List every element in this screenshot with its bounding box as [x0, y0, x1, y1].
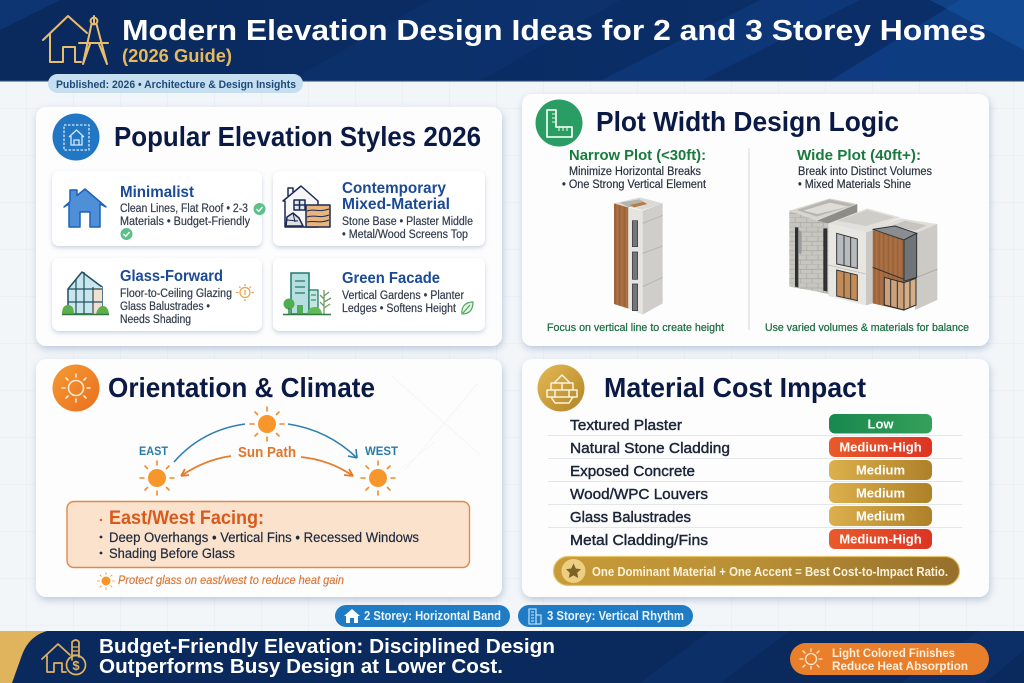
- card: glass-forward: [52, 258, 262, 331]
- row: exposed concrete: [570, 460, 932, 480]
- card: minimalist: Clean Lines, Flat Roof • 2-3: [120, 203, 248, 215]
- title: Modern Elevation Design Ideas for 2 and 3 Storey Homes: [122, 15, 986, 47]
- callout: east/west facing: Deep Overhangs • Vertical Fins • Recessed Windows: [109, 530, 419, 545]
- card: contemporary mixed-material: Contemporary: [342, 180, 446, 197]
- icon: glass house: [62, 272, 109, 314]
- note: protect glass: Protect glass on east/west to reduce heat gain: [118, 575, 344, 587]
- pill: 3 storey: 3 Storey: Vertical Rhythm: [547, 609, 684, 623]
- pill: 2 storey: 2 Storey: Horizontal Band: [364, 609, 501, 623]
- caption: narrow: Focus on vertical line to create height: [547, 322, 724, 334]
- card: minimalist: Minimalist: [120, 184, 194, 201]
- card: contemporary mixed-material: • Metal/Wood Screens Top: [342, 229, 468, 241]
- published pill: [48, 74, 303, 93]
- icon: house and compass: [43, 16, 108, 64]
- footer message: Outperforms Busy Design at Lower Cost.: [99, 656, 503, 678]
- caption: wide: Use varied volumes & materials for balance: [765, 322, 969, 334]
- card: glass-forward: Floor-to-Ceiling Glazing: [120, 288, 232, 300]
- row: glass balustrades: [570, 506, 932, 526]
- card: green facade: Vertical Gardens • Planter: [342, 290, 464, 302]
- sun path diagram: [139, 407, 399, 495]
- card: green facade: Ledges • Softens Height: [342, 303, 457, 315]
- row: glass balustrades: Medium: [856, 508, 905, 524]
- card: glass-forward: Glass-Forward: [120, 268, 223, 285]
- pill: 2 storey: [335, 605, 510, 627]
- icon: check marks: [120, 203, 266, 240]
- icon: blueprint house: [52, 114, 100, 160]
- icon: house with coin: $: [72, 658, 80, 673]
- published pill: Published: 2026 • Architecture & Design Insights: [56, 79, 296, 91]
- panel: material cost impact: [522, 359, 989, 597]
- wide plot text: [797, 147, 932, 191]
- row: wood/wpc louvers: Wood/WPC Louvers: [570, 486, 708, 503]
- sun path diagram: EAST: [139, 444, 169, 458]
- panel: popular elevation styles: [36, 107, 502, 346]
- row: metal cladding/fins: [570, 529, 932, 549]
- row: wood/wpc louvers: Medium: [856, 486, 905, 500]
- heading: Orientation & Climate: [108, 372, 375, 403]
- icon: small sun: [236, 284, 254, 301]
- banner: best ratio: [554, 556, 960, 586]
- illustration: wide building: [789, 198, 937, 311]
- icon: bricks: [538, 364, 584, 412]
- heading: Popular Elevation Styles 2026: [114, 121, 481, 152]
- row: exposed concrete: Medium: [856, 462, 905, 478]
- row: textured plaster: [570, 414, 932, 434]
- heading: Material Cost Impact: [604, 372, 866, 403]
- narrow plot text: Narrow Plot (<30ft):: [569, 147, 706, 164]
- icon: ruler: [536, 100, 582, 146]
- card: contemporary mixed-material: [273, 171, 485, 246]
- card: green facade: [273, 258, 485, 331]
- row dividers: [548, 436, 962, 528]
- row: metal cladding/fins: Medium-High: [839, 532, 922, 546]
- footer message: [99, 636, 555, 678]
- row: textured plaster: Textured Plaster: [570, 417, 682, 434]
- card: contemporary mixed-material: Stone Base • Plaster Middle: [342, 216, 473, 228]
- sun path diagram: Sun Path: [238, 444, 296, 461]
- row: natural stone cladding: Medium-High: [839, 440, 922, 454]
- panel: orientation and climate: [36, 359, 502, 597]
- card: glass-forward: Needs Shading: [120, 314, 191, 326]
- narrow plot text: • One Strong Vertical Element: [562, 179, 707, 191]
- row: textured plaster: Low: [868, 416, 894, 432]
- banner: best ratio: One Dominant Material + One Accent = Best Cost-to-Impact Ratio.: [592, 564, 948, 579]
- callout: east/west facing: [67, 502, 470, 568]
- card: green facade: Green Facade: [342, 270, 440, 287]
- row: exposed concrete: Exposed Concrete: [570, 463, 695, 480]
- note: protect glass: [98, 572, 344, 590]
- card: minimalist: Materials • Budget-Friendly: [120, 216, 250, 228]
- row: natural stone cladding: Natural Stone Cladding: [570, 440, 730, 457]
- heading: Plot Width Design Logic: [596, 106, 899, 137]
- divider: [748, 148, 750, 330]
- callout: east/west facing: East/West Facing:: [109, 508, 264, 529]
- icon: house with coin: [42, 640, 86, 674]
- card: contemporary mixed-material: Mixed-Material: [342, 196, 450, 213]
- pill: 3 storey: [518, 605, 693, 627]
- icon: sun circle: [52, 364, 100, 412]
- card: glass-forward: Glass Balustrades •: [120, 301, 210, 313]
- icon: mixed material house: [283, 186, 330, 227]
- header banner: [0, 0, 1024, 82]
- icon: blue house: [64, 189, 106, 227]
- callout: light colored finishes: [790, 643, 989, 675]
- wide plot text: Wide Plot (40ft+):: [797, 147, 921, 164]
- wide plot text: • Mixed Materials Shine: [798, 179, 911, 191]
- callout: east/west facing: Shading Before Glass: [109, 546, 235, 561]
- icon: green buildings: [283, 273, 331, 314]
- row: metal cladding/fins: Metal Cladding/Fins: [570, 532, 708, 549]
- sun path diagram: WEST: [365, 444, 399, 458]
- callout: light colored finishes: Reduce Heat Absorption: [832, 659, 968, 673]
- subtitle: (2026 Guide): [122, 46, 232, 66]
- wide plot text: Break into Distinct Volumes: [798, 166, 932, 178]
- row: glass balustrades: Glass Balustrades: [570, 509, 691, 526]
- narrow plot text: [562, 147, 707, 191]
- narrow plot text: Minimize Horizontal Breaks: [569, 166, 701, 178]
- illustration: narrow building: [614, 197, 663, 315]
- footer message: Budget-Friendly Elevation: Disciplined Design: [99, 636, 555, 658]
- icon: leaf: [462, 302, 473, 314]
- footer banner: [0, 631, 1024, 683]
- callout: light colored finishes: Light Colored Finishes: [832, 646, 955, 660]
- panel: plot width design logic: [522, 94, 989, 346]
- row: wood/wpc louvers: [570, 483, 932, 503]
- row: natural stone cladding: [570, 437, 932, 457]
- card: minimalist: [52, 171, 266, 246]
